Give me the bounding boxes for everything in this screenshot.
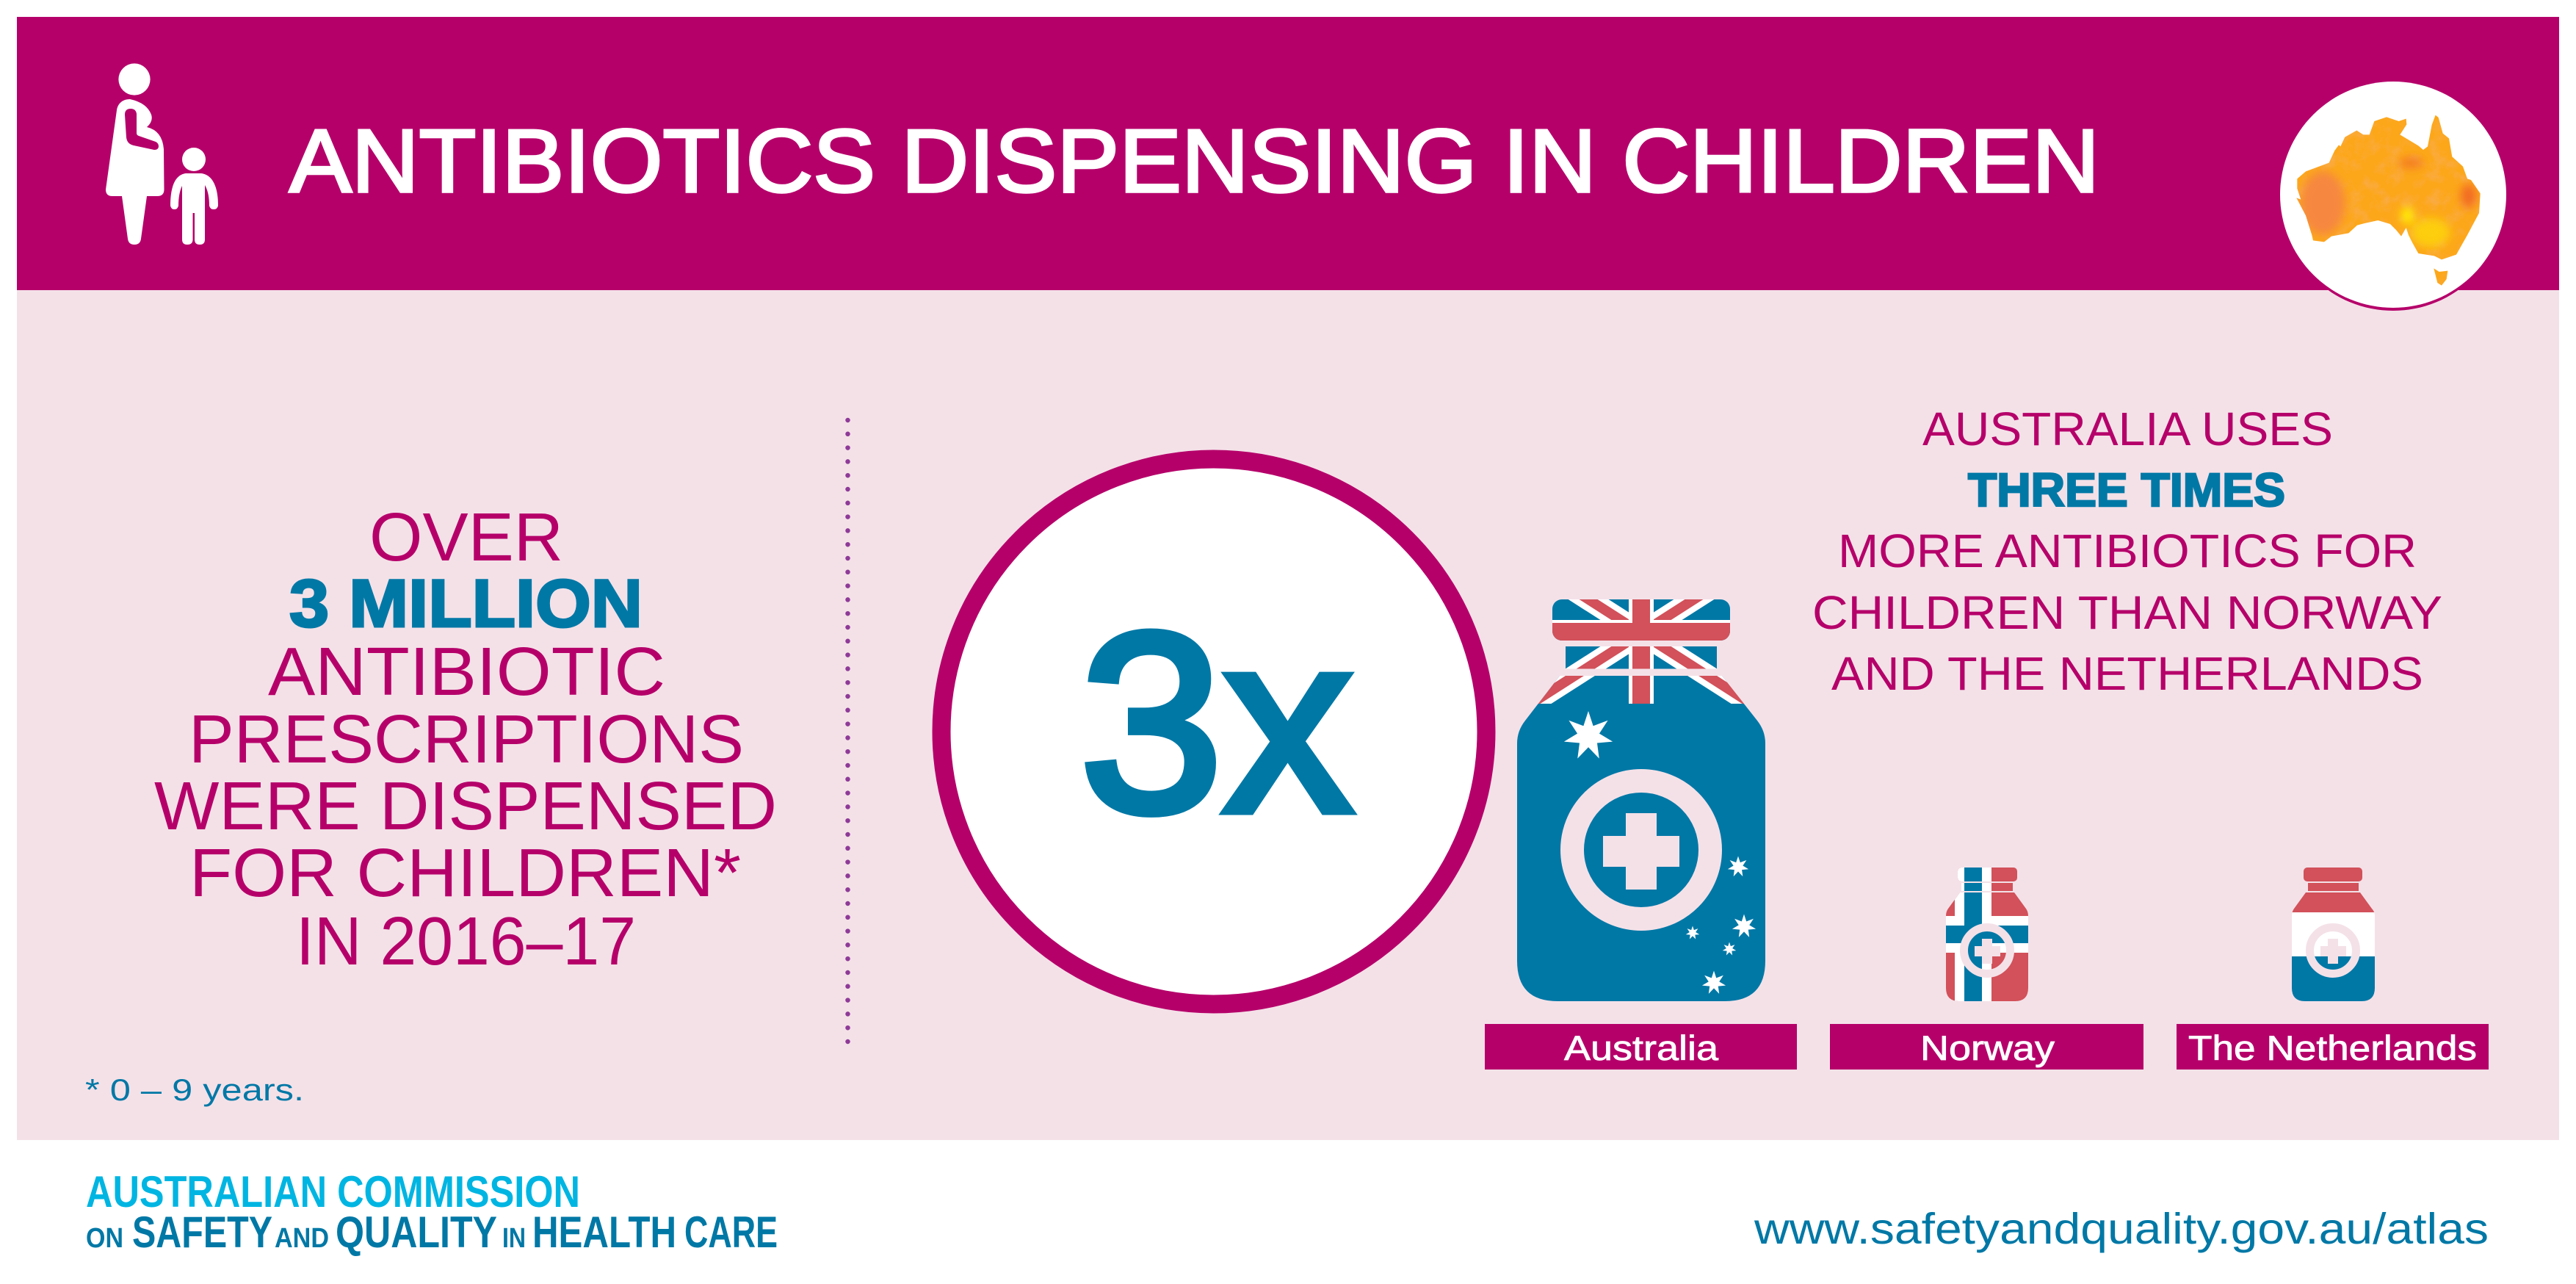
title: ANTIBIOTICS DISPENSING IN CHILDREN — [289, 111, 2099, 211]
label: The Netherlands: The Netherlands — [2188, 1028, 2477, 1067]
icon: Norway flag bottle — [1946, 868, 2028, 1001]
icon: pregnant woman and child — [106, 63, 218, 245]
left statistic text block: PRESCRIPTIONS — [189, 701, 744, 777]
right comparison text block: AND THE NETHERLANDS — [1831, 647, 2423, 700]
footnote: * 0 – 9 years. — [85, 1072, 304, 1107]
logo: Australian Commission on Safety and Quality in Health Care — [86, 1167, 778, 1257]
website URL: www.safetyandquality.gov.au/atlas — [1754, 1205, 2489, 1253]
logo: Australian Commission on Safety and Quality in Health Care: AND — [275, 1223, 329, 1254]
left statistic text block — [154, 499, 777, 979]
label: Australia — [1485, 1024, 1797, 1070]
label: Australia: Australia — [1564, 1028, 1719, 1067]
logo: Australian Commission on Safety and Quality in Health Care: SAFETY — [132, 1208, 272, 1257]
left statistic text block: WERE DISPENSED — [154, 768, 777, 844]
left statistic text block: 3 MILLION — [289, 566, 643, 641]
right comparison text block: MORE ANTIBIOTICS FOR — [1838, 524, 2417, 577]
left statistic text block: FOR CHILDREN* — [189, 834, 741, 911]
logo: Australian Commission on Safety and Quality in Health Care: AUSTRALIAN COMMISSION — [86, 1167, 580, 1216]
logo: Australian Commission on Safety and Quality in Health Care: IN — [502, 1223, 526, 1254]
icon: Netherlands flag bottle — [2292, 868, 2375, 1001]
icon: Australia map in circle — [2280, 82, 2506, 311]
page background panel — [17, 290, 2559, 1140]
header banner — [17, 17, 2559, 290]
right comparison text block: CHILDREN THAN NORWAY — [1812, 586, 2442, 639]
left statistic text block: IN 2016–17 — [296, 903, 636, 979]
logo: Australian Commission on Safety and Quality in Health Care: HEALTH — [532, 1208, 676, 1257]
logo: Australian Commission on Safety and Quality in Health Care: QUALITY — [336, 1208, 497, 1257]
logo: Australian Commission on Safety and Quality in Health Care: CARE — [684, 1208, 778, 1257]
dotted divider — [845, 420, 850, 1045]
icon: Australia flag bottle — [1517, 599, 1765, 1001]
right comparison text block — [1812, 403, 2442, 700]
3x circle callout: 3x — [1079, 580, 1353, 865]
right comparison text block: THREE TIMES — [1968, 464, 2285, 516]
right comparison text block: AUSTRALIA USES — [1922, 403, 2333, 455]
3x circle callout — [941, 459, 1486, 1004]
label: Norway: Norway — [1920, 1028, 2055, 1067]
label: The Netherlands — [2177, 1024, 2489, 1070]
left statistic text block: OVER — [369, 499, 563, 575]
left statistic text block: ANTIBIOTIC — [268, 633, 665, 710]
label: Norway — [1830, 1024, 2143, 1070]
logo: Australian Commission on Safety and Quality in Health Care: ON — [86, 1223, 123, 1254]
